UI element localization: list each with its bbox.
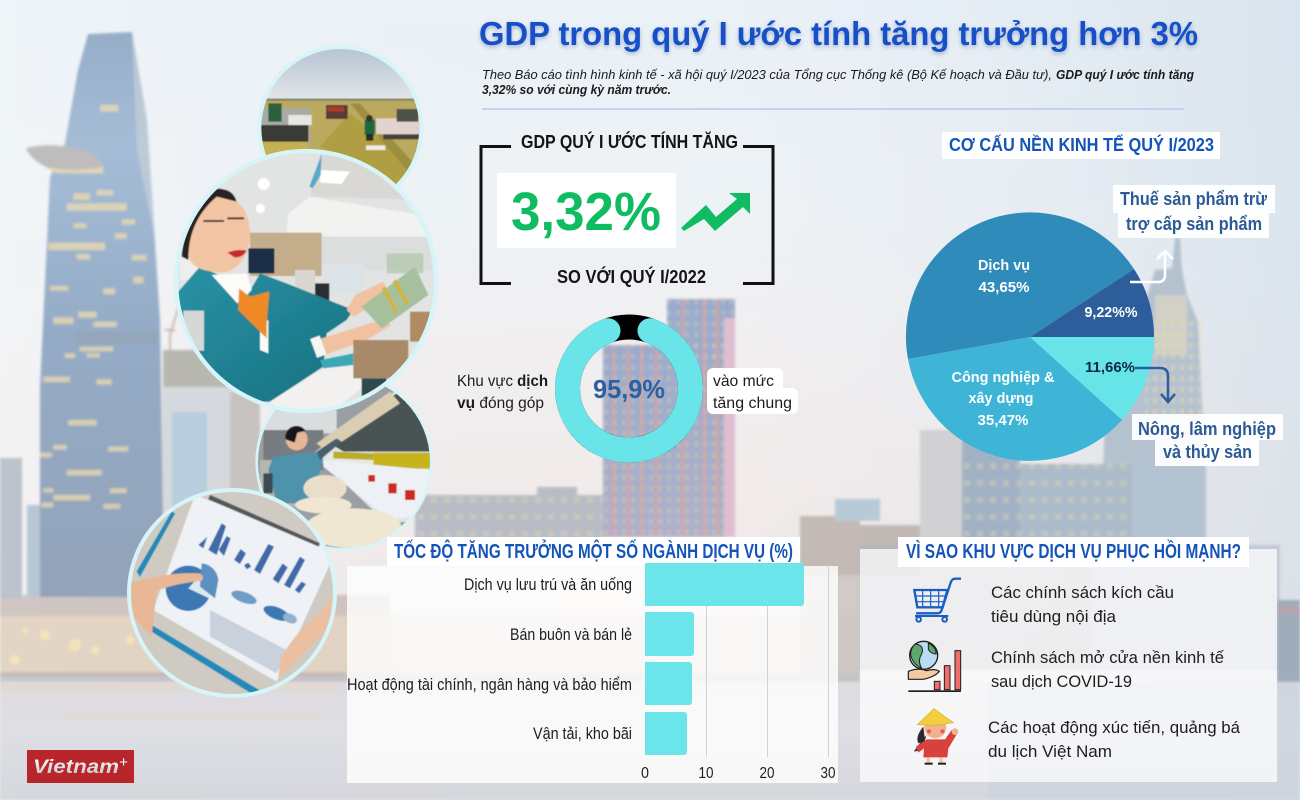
reason list: sau dịch COVID-19: [991, 672, 1132, 691]
pie labels: 43,65%: [978, 280, 1030, 296]
axis values: [641, 765, 836, 782]
intro text: 3,32% so với cùng kỳ năm trước.: [482, 83, 671, 97]
icon: globe, hand and bars: [908, 641, 961, 692]
heading: economic structure: [942, 132, 1220, 159]
arrow: agriculture label: [1135, 368, 1175, 402]
pie labels: 35,47%: [978, 413, 1029, 429]
callout bottom label: SO VỚI QUÝ I/2022: [557, 266, 706, 287]
bar labels: Vận tải, kho bãi: [533, 725, 632, 743]
bar labels: [347, 576, 632, 743]
donut value arc: [567, 331, 691, 450]
panel heading: [387, 537, 800, 566]
left bank: [0, 595, 390, 617]
bar labels: Hoạt động tài chính, ngân hàng và bảo hiểm: [347, 676, 632, 694]
label: taxes: Thuế sản phẩm trừ: [1120, 189, 1268, 209]
logo: Vietnam+: Vietnam: [33, 757, 119, 778]
reason list: Chính sách mở cửa nền kinh tế: [991, 648, 1225, 667]
donut right caption: [707, 368, 798, 414]
right buildings: [920, 430, 962, 560]
behind right panel: [860, 545, 1090, 670]
donut left caption: Khu vực dịch: [457, 373, 548, 390]
bars: [645, 563, 804, 755]
pie labels: xây dựng: [968, 391, 1034, 407]
icon: woman in red ao dai with conical hat: [914, 709, 958, 765]
panel heading: [898, 537, 1249, 567]
value 3,32%: 3,32%: [511, 182, 661, 242]
bracket frame: [481, 146, 773, 284]
pie chart: economic structure: [906, 212, 1154, 461]
donut value: 95,9%: [593, 374, 665, 404]
intro text: GDP quý I ước tính tăng: [1056, 68, 1194, 82]
reason list: tiêu dùng nội địa: [991, 607, 1117, 626]
label: taxes: trợ cấp sản phẩm: [1126, 214, 1262, 234]
label: agriculture: Nông, lâm nghiệp: [1138, 419, 1276, 439]
heading: economic structure: CƠ CẤU NỀN KINH TẾ QUÝ I/2023: [949, 134, 1214, 155]
reason list: [988, 583, 1241, 761]
icon: shopping cart: [914, 579, 961, 622]
bar labels: Dịch vụ lưu trú và ăn uống: [464, 576, 632, 594]
label: agriculture: và thủy sản: [1163, 442, 1252, 462]
intro text: [482, 68, 1194, 97]
axis values: 10: [698, 765, 714, 782]
reason list: Các chính sách kích cầu: [991, 583, 1174, 602]
Bitexco tower: [40, 32, 163, 597]
reason list: du lịch Việt Nam: [988, 742, 1112, 761]
label: agriculture: [1132, 414, 1283, 466]
panel: service growth bar chart: [347, 537, 838, 783]
donut left caption: vụ đóng góp: [457, 395, 544, 412]
Landmark tower, right: [1100, 238, 1206, 540]
donut: service contribution: [567, 327, 691, 450]
axis values: 0: [641, 765, 649, 782]
bar labels: Bán buôn và bán lẻ: [510, 626, 632, 644]
label: taxes: [1113, 185, 1275, 238]
slice: taxes: [1030, 269, 1154, 337]
photo: tablet with charts: [127, 489, 336, 697]
pie labels: [952, 258, 1138, 429]
panel heading: TỐC ĐỘ TĂNG TRƯỞNG MỘT SỐ NGÀNH DỊCH VỤ (%): [394, 539, 793, 563]
callout top label: GDP QUÝ I ƯỚC TÍNH TĂNG: [521, 131, 738, 152]
donut left caption: [457, 373, 548, 412]
axis values: 20: [760, 765, 775, 782]
donut right caption: tăng chung: [713, 395, 792, 412]
slice: industry: [908, 337, 1122, 461]
white value box: [497, 173, 676, 248]
centre tower: [603, 345, 667, 537]
distant buildings left: [0, 458, 22, 598]
logo: Vietnam+: [27, 750, 134, 783]
photo: textile factory: [253, 373, 433, 553]
logo: Vietnam+: +: [119, 754, 128, 771]
reason list: Các hoạt động xúc tiến, quảng bá: [988, 718, 1241, 737]
pie labels: Dịch vụ: [978, 258, 1030, 274]
grid lines: [706, 566, 828, 757]
GDP growth callout: [481, 131, 773, 287]
pie labels: 11,66%: [1085, 360, 1135, 376]
icon: rising arrow: [681, 193, 750, 231]
axis values: 30: [820, 765, 836, 782]
river: [0, 682, 1300, 800]
intro text: Theo Báo cáo tình hình kinh tế - xã hội quý I/2023 của Tổng cục Thống kê (Bộ Kế hoạch và Đầu tư),: [482, 68, 1052, 82]
title: GDP trong quý I ước tính tăng trưởng hơn 3%: [479, 15, 1198, 52]
donut right caption: vào mức: [713, 373, 774, 390]
arrow: taxes label: [1130, 251, 1173, 282]
slice: services: [906, 212, 1134, 359]
pie labels: Công nghiệp &: [952, 370, 1055, 386]
pie labels: 9,22%%: [1084, 305, 1138, 321]
photo: bank teller with banknotes: [170, 150, 443, 417]
photo: rice harvest: [258, 45, 424, 187]
panel: why services recovered: [860, 537, 1277, 782]
slice: agriculture: [1030, 337, 1154, 420]
